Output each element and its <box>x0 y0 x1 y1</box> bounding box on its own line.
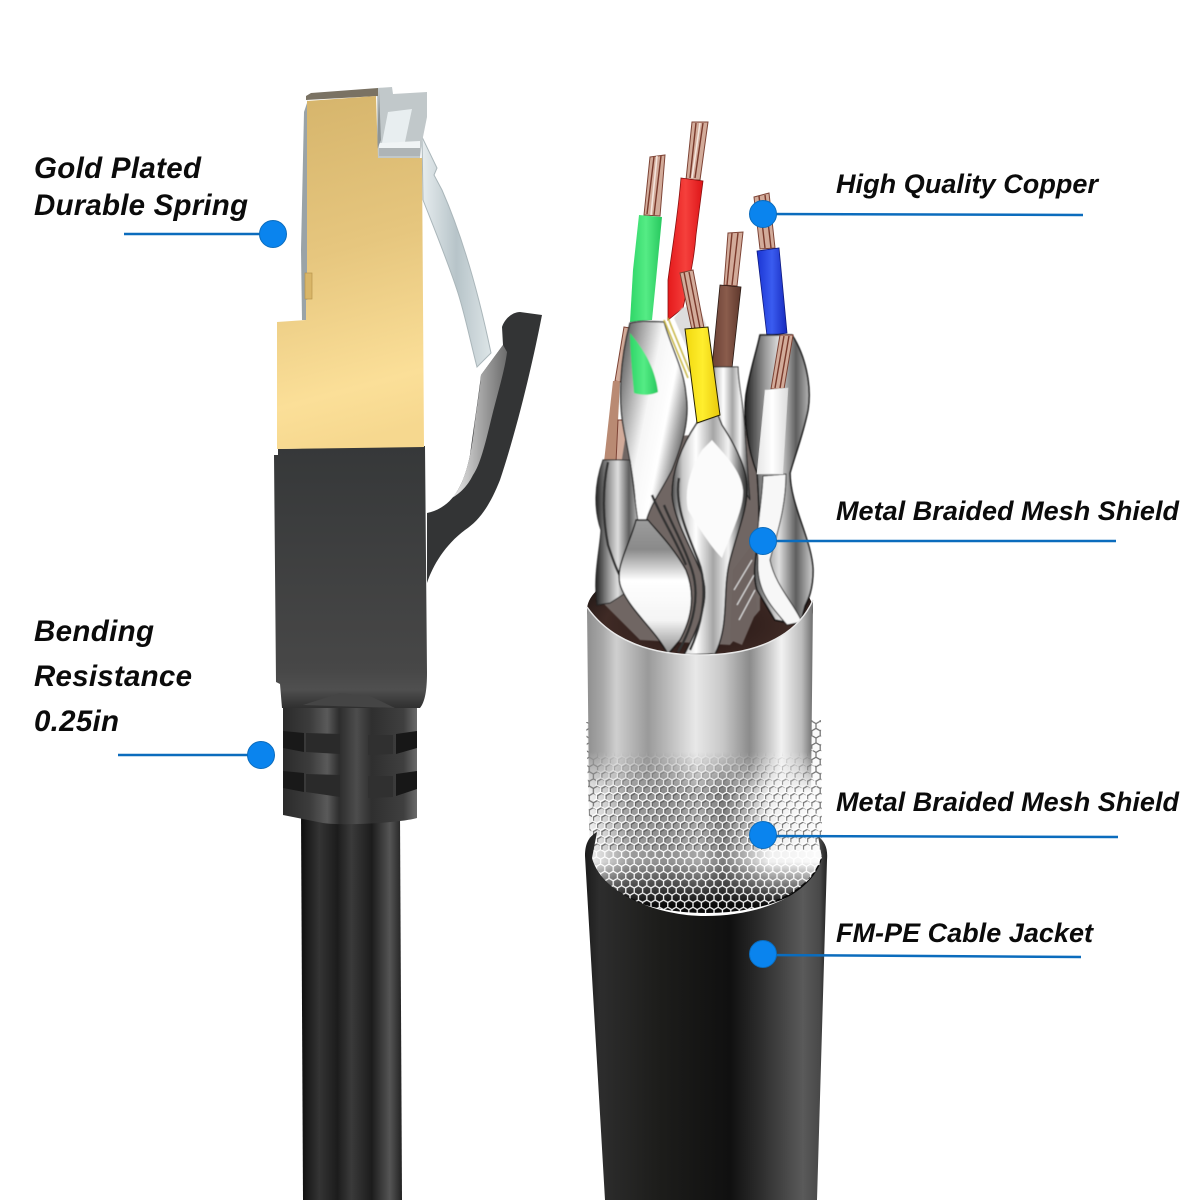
label: bending resistance: Resistance <box>34 660 192 693</box>
label: metal braided mesh shield upper <box>750 496 1180 554</box>
thin braided strands <box>730 545 757 645</box>
strand D: right foil <box>745 335 813 625</box>
label: bending resistance: 0.25in <box>34 705 119 738</box>
dark backing behind foil strands <box>600 430 760 645</box>
wire: green <box>630 155 665 322</box>
label: metal braided mesh shield lower <box>750 787 1180 848</box>
wire: red <box>668 122 708 320</box>
label: metal braided mesh shield lower: Metal Braided Mesh Shield <box>836 787 1180 817</box>
label: gold plated spring: Durable Spring <box>34 189 248 222</box>
gold clip tab <box>305 273 312 299</box>
gold plated shield <box>277 96 424 449</box>
black connector housing <box>274 446 427 708</box>
clear latch arm <box>422 137 491 367</box>
green wire lower <box>630 333 658 395</box>
mesh dark hex shading <box>586 720 822 850</box>
mesh body <box>587 725 822 912</box>
strand C highlight <box>687 440 743 558</box>
strand C: center foil <box>672 415 747 655</box>
jacket interior <box>589 803 823 913</box>
label: high quality copper <box>750 169 1099 228</box>
metal well interior <box>587 562 813 658</box>
label: gold plated spring: Gold Plated <box>34 152 202 185</box>
label: bending resistance <box>34 615 274 768</box>
exposed cable cutaway <box>585 122 827 1200</box>
wire: brown <box>712 232 743 368</box>
label: cable jacket: FM-PE Cable Jacket <box>836 918 1094 948</box>
mesh white hex pattern <box>588 740 824 914</box>
FM-PE cable jacket <box>585 832 827 1200</box>
label: cable jacket <box>750 918 1094 968</box>
label: metal braided mesh shield upper: Metal Braided Mesh Shield <box>836 496 1180 526</box>
strand B ribbons <box>664 505 696 652</box>
sleeve rim highlight <box>587 600 813 655</box>
cable <box>301 815 402 1200</box>
foil shielded pairs <box>596 304 813 655</box>
wire: blue <box>754 193 787 336</box>
rear latch lever <box>427 312 542 583</box>
strand A: left foil <box>596 460 640 605</box>
label: gold plated spring <box>34 152 286 248</box>
wire: yellow <box>680 270 720 423</box>
strand D front ribbon <box>757 474 802 625</box>
twisted coloured threads <box>664 318 690 378</box>
strand B: lower bulb <box>619 520 692 654</box>
boot top arc <box>303 693 395 708</box>
clear plug block <box>377 87 427 158</box>
wire: far left copper <box>604 327 630 462</box>
strand C folds <box>678 478 704 650</box>
foil: green pair upper <box>621 321 687 522</box>
metal side strip <box>301 100 308 320</box>
label: bending resistance: Bending <box>34 615 154 648</box>
RJ45 connector and cable <box>274 87 542 1200</box>
label: high quality copper: High Quality Copper <box>836 169 1099 199</box>
foil: brown pair <box>711 367 750 500</box>
connector top edge <box>306 88 378 100</box>
silver foil sleeve <box>587 600 813 792</box>
wire: white <box>757 335 793 474</box>
strain relief boot <box>283 700 417 824</box>
metal braided mesh <box>586 720 824 914</box>
